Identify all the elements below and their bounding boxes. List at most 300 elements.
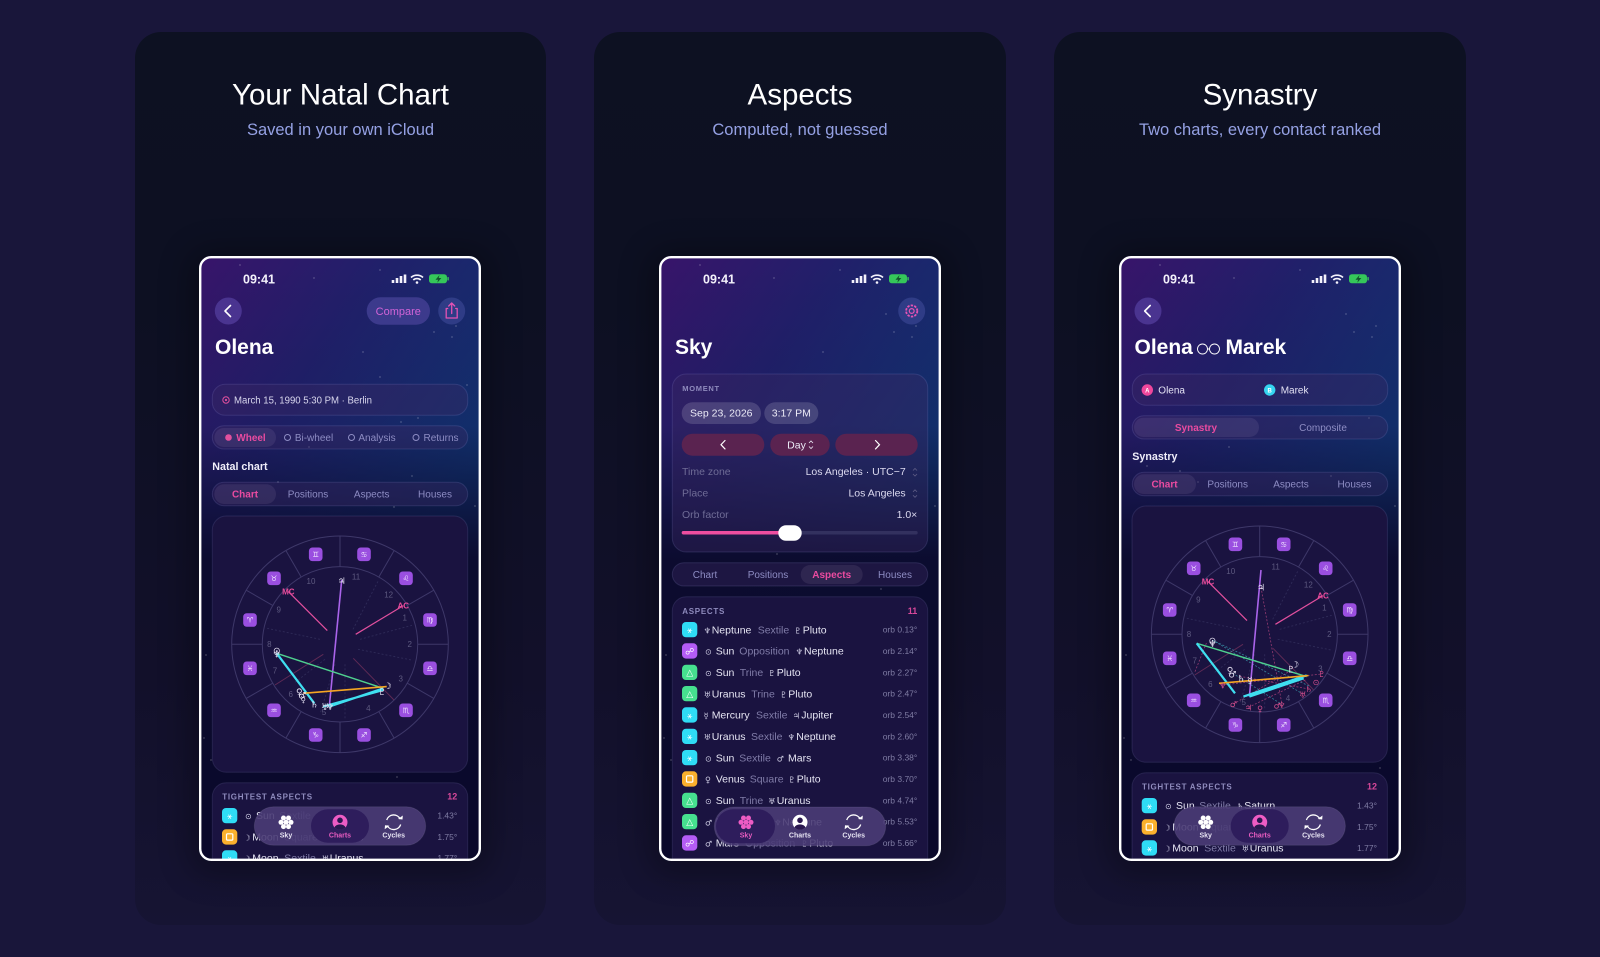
mode tabs	[212, 426, 468, 449]
heading: synastry: Synastry	[1203, 78, 1318, 112]
icon: charts	[1252, 815, 1267, 830]
aspect row: ☍	[685, 839, 694, 849]
compare button	[367, 297, 430, 325]
chart: synastry wheel: ♃	[1257, 584, 1265, 594]
chart: synastry wheel	[1151, 526, 1368, 743]
chart: natal wheel: ☿	[301, 695, 306, 705]
chart: synastry wheel: 10	[1226, 567, 1236, 576]
aspect row	[682, 793, 917, 808]
chart: natal wheel: 10	[307, 577, 316, 586]
subtitle: contacts: Two charts, every contact ranked	[1139, 121, 1381, 139]
aspect row: ♅	[1242, 844, 1249, 854]
subtitle: computed: Computed, not guessed	[712, 121, 888, 139]
chart tabs: Chart	[232, 490, 259, 501]
chart: synastry wheel: ♎	[1346, 654, 1353, 663]
aspect row: Saturn	[324, 810, 355, 822]
chart: natal wheel: ♏	[403, 706, 410, 715]
chart: synastry wheel: 4	[1286, 694, 1291, 703]
aspect row: Square	[1204, 822, 1238, 834]
panel: tightest aspects	[212, 782, 468, 859]
aspect row: orb 2.54°	[883, 710, 917, 720]
chart: natal wheel: 9	[276, 605, 281, 614]
aspect row: orb 2.60°	[883, 731, 917, 741]
aspect row: Moon	[1172, 822, 1199, 834]
settings rows: Place	[682, 487, 708, 499]
chart: natal wheel	[232, 536, 448, 753]
aspect row	[682, 665, 917, 680]
aspect row: ♂	[705, 818, 712, 827]
aspect row	[682, 835, 917, 851]
chart: natal wheel: ♅	[321, 703, 329, 713]
person card: Olena	[1158, 385, 1185, 396]
chart: natal wheel: 12	[384, 590, 394, 599]
aspect row: orb 2.47°	[883, 689, 917, 699]
chart: synastry wheel: ♂	[1230, 700, 1237, 709]
chart: natal wheel: ♂	[298, 691, 306, 701]
phone: sky screen	[659, 256, 941, 887]
aspect row: ♄	[1237, 802, 1244, 811]
aspect row: ⊙	[705, 797, 712, 806]
chart: synastry wheel: ♀	[1257, 704, 1263, 713]
panel: moment: MOMENT	[682, 384, 720, 393]
chart: synastry wheel: ♌	[1322, 564, 1329, 573]
phone: natal chart screen	[199, 256, 481, 883]
aspect row: ⚹	[227, 854, 233, 864]
icon: sky	[738, 816, 754, 829]
mode tabs: Synastry	[1175, 423, 1218, 434]
panel: aspects list: 11	[908, 606, 917, 616]
title: Olena	[215, 336, 274, 359]
chart: synastry wheel: ♐	[1280, 721, 1287, 730]
chart: natal wheel: 11	[352, 572, 361, 581]
bottom navigation: Cycles	[842, 833, 865, 840]
chart: synastry wheel: ♑	[1232, 721, 1239, 730]
panel: tightest aspects: 12	[1367, 782, 1377, 792]
panel: aspects list	[672, 597, 928, 887]
aspect row: Sun	[716, 752, 735, 764]
chart: synastry wheel: ☿	[1247, 676, 1253, 686]
aspect row: orb 3.38°	[883, 753, 917, 763]
chart: natal wheel: ♑	[312, 731, 319, 740]
aspect row: Sun	[256, 810, 275, 822]
aspect row: 1.77°	[1357, 843, 1377, 853]
aspect row: 1.77°	[437, 853, 457, 863]
chart: natal wheel: ♒	[271, 706, 278, 715]
chart: synastry wheel: 12	[1304, 580, 1313, 589]
chart: synastry wheel: ♋	[1280, 540, 1287, 549]
panel: natal wheel	[212, 516, 468, 772]
settings rows	[682, 466, 917, 521]
aspect row: ⚹	[1147, 802, 1153, 812]
stepper	[682, 434, 918, 456]
chart: natal wheel: 1	[402, 613, 407, 622]
aspect row	[682, 707, 917, 723]
settings rows: Los Angeles	[848, 487, 906, 499]
chart: synastry wheel: ⊙	[1313, 678, 1319, 687]
panel: tightest aspects	[1132, 773, 1387, 883]
chart: natal wheel: ♎	[427, 664, 434, 673]
mode tabs: Returns	[423, 433, 459, 444]
icon: charts	[792, 815, 808, 830]
aspect row: Mars	[716, 838, 739, 850]
mode tabs: Analysis	[358, 433, 396, 444]
aspect row: ⊙	[705, 669, 712, 678]
panel: tightest aspects: TIGHTEST ASPECTS	[222, 793, 313, 802]
aspect row: Uranus	[1250, 822, 1284, 834]
bottom navigation: Charts	[789, 833, 811, 840]
view tabs: Aspects	[812, 570, 852, 581]
compare button: Compare	[376, 306, 421, 318]
chart: synastry wheel: 7	[1192, 656, 1197, 665]
title	[1134, 336, 1287, 359]
chart: natal wheel: ♆	[326, 703, 334, 713]
aspect row	[1142, 798, 1377, 813]
chart: natal wheel: ♋	[361, 550, 367, 559]
aspect row: ⊙	[705, 754, 712, 763]
chart: synastry wheel: AC	[1317, 591, 1329, 600]
icon: cycles	[1304, 815, 1322, 830]
aspect row: ♅	[1242, 824, 1249, 832]
aspect row: △	[686, 669, 693, 679]
chart tabs: Aspects	[1273, 480, 1309, 491]
settings rows: Orb factor	[682, 509, 729, 521]
aspect row: ♇	[794, 626, 801, 635]
aspect row	[682, 729, 917, 744]
aspect row: Saturn	[1244, 800, 1275, 812]
aspect row: ♅	[322, 854, 329, 864]
title: Olena	[1134, 336, 1193, 359]
aspect row: ☽	[244, 854, 251, 864]
chart: synastry wheel: ♇	[1287, 665, 1295, 675]
aspect row: ♇	[780, 690, 787, 699]
aspect row: orb 2.27°	[883, 667, 917, 677]
aspect row: ⚹	[687, 733, 693, 743]
aspect row	[682, 771, 917, 787]
chart: natal wheel: ♉	[271, 574, 278, 583]
aspect row: ♂	[705, 840, 712, 849]
aspect row: Uranus	[330, 832, 364, 844]
person card: A	[1145, 388, 1150, 394]
aspect row: ⚹	[227, 812, 233, 822]
chart: synastry wheel: 9	[1196, 595, 1201, 604]
chart: synastry wheel: 8	[1187, 630, 1192, 639]
aspect row: orb 3.70°	[883, 774, 917, 784]
chart: natal wheel: ♐	[361, 731, 367, 740]
aspect row: ♇	[801, 840, 808, 849]
chart: natal wheel: ♊	[312, 550, 319, 559]
aspect row: Uranus	[712, 688, 746, 700]
aspect row: ♇	[788, 776, 795, 785]
chart: natal wheel: ♆	[273, 650, 281, 660]
chart: synastry wheel: ♆	[1219, 681, 1226, 690]
aspect row: 1.75°	[437, 832, 457, 842]
heading: your natal chart: Your Natal Chart	[232, 78, 449, 112]
date pill	[682, 402, 761, 424]
chart: natal wheel: 6	[288, 690, 293, 699]
back button	[1134, 298, 1162, 324]
chart: synastry wheel: 5	[1241, 698, 1246, 707]
aspect row: Trine	[741, 816, 765, 828]
mode tabs: Composite	[1299, 423, 1347, 434]
chart tabs	[212, 482, 468, 506]
aspect row	[222, 850, 457, 859]
aspect row: Opposition	[745, 838, 795, 850]
chart: synastry wheel: 1	[1322, 603, 1327, 612]
bottom navigation: Charts	[1249, 833, 1271, 840]
bottom navigation: Sky	[740, 833, 752, 840]
aspect row: ♆	[788, 733, 795, 742]
section heading: Synastry	[1132, 451, 1178, 463]
icon: cycles	[385, 815, 403, 830]
view tabs	[672, 563, 928, 586]
aspect row: Trine	[740, 667, 763, 679]
chart: synastry wheel: ⊙	[1209, 636, 1216, 646]
chart: synastry wheel: ♏	[1322, 696, 1329, 705]
chart: synastry wheel: ♉	[1190, 564, 1197, 573]
chart: synastry wheel: 3	[1318, 665, 1323, 674]
aspect row: Opposition	[739, 646, 790, 658]
panel: tightest aspects: TIGHTEST ASPECTS	[1142, 783, 1232, 792]
aspect row: ⊙	[705, 648, 712, 657]
panel: synastry wheel	[1132, 506, 1387, 762]
aspect row	[682, 686, 917, 701]
aspect row: Moon	[252, 832, 279, 844]
aspect row: ♅	[704, 690, 711, 699]
aspect row: ♅	[704, 733, 711, 742]
aspect row: 1.75°	[1357, 822, 1377, 832]
chart: synastry wheel: ♄	[1237, 675, 1245, 685]
aspect row: ♆	[774, 818, 781, 827]
status bar: 09:41	[243, 272, 275, 286]
aspect row: Pluto	[777, 667, 801, 679]
chart: synastry wheel: 11	[1272, 562, 1280, 571]
aspect row: ☿	[704, 712, 709, 721]
aspect row: △	[686, 797, 693, 807]
icon: sky	[278, 816, 294, 829]
aspect row: Moon	[1172, 842, 1199, 854]
chart: natal wheel: 4	[366, 704, 371, 713]
back button	[215, 298, 242, 324]
aspect row	[222, 829, 457, 845]
time pill	[764, 402, 818, 424]
chart: natal wheel: ♌	[403, 574, 409, 583]
panel: your natal chart	[135, 32, 546, 925]
aspect row: △	[686, 690, 693, 700]
status bar	[244, 274, 449, 284]
chart: synastry wheel: ♅	[1299, 690, 1306, 699]
time pill: 3:17 PM	[772, 408, 811, 420]
aspect row: ⚹	[687, 754, 693, 764]
chart tabs: Houses	[418, 490, 452, 501]
aspect row: Uranus	[777, 795, 811, 807]
subtitle: saved in icloud: Saved in your own iCloud	[247, 121, 434, 139]
chart tabs	[1132, 472, 1388, 496]
aspect row	[222, 808, 457, 823]
bottom navigation	[1174, 807, 1345, 845]
bottom navigation	[714, 807, 886, 846]
birth details card: March 15, 1990 5:30 PM · Berlin	[234, 396, 372, 406]
aspect row: Neptune	[796, 731, 836, 743]
heading: aspects: Aspects	[748, 78, 852, 112]
settings rows: Time zone	[682, 466, 731, 478]
chart: natal wheel: ☽	[384, 682, 392, 692]
icon: charts	[332, 815, 348, 830]
chart: synastry wheel: ☽	[1291, 660, 1299, 670]
chart: natal wheel: AC	[398, 601, 409, 610]
aspect row: orb 0.13°	[883, 625, 917, 635]
panel: tightest aspects: 12	[447, 792, 457, 802]
aspect row: Sextile	[1199, 800, 1231, 812]
person card	[1132, 374, 1388, 405]
aspect row: ♅	[768, 797, 775, 806]
chart tabs: Positions	[1207, 480, 1248, 491]
aspect row: Neptune	[782, 816, 822, 828]
orb slider	[682, 525, 918, 541]
chart tabs: Aspects	[354, 490, 389, 501]
chart: natal wheel: 7	[273, 666, 278, 675]
share button	[438, 298, 465, 324]
aspect row: △	[686, 818, 693, 828]
aspect row: Pluto	[803, 624, 827, 636]
aspect row	[682, 750, 917, 765]
aspect row: orb 5.53°	[883, 817, 917, 827]
bottom navigation: Sky	[1199, 833, 1212, 840]
settings rows: 1.0×	[897, 509, 917, 521]
person card: B	[1268, 388, 1273, 394]
aspect row: ♄	[317, 812, 324, 821]
aspect row: ♀	[705, 776, 711, 785]
aspect row: Sun	[716, 646, 735, 658]
icon: cycles	[845, 815, 863, 830]
aspect row: ⚹	[687, 626, 693, 636]
chart: natal wheel: ⊙	[273, 646, 280, 656]
aspect row: ☽	[1164, 824, 1171, 832]
aspect row: Uranus	[330, 852, 364, 864]
settings button	[898, 298, 925, 324]
chart: synastry wheel: 6	[1208, 680, 1213, 689]
date pill: Sep 23, 2026	[690, 408, 753, 420]
aspect row: Trine	[740, 795, 763, 807]
chart: synastry wheel: ♍	[1346, 606, 1353, 615]
section heading: Natal chart	[212, 461, 268, 473]
chart tabs: Positions	[288, 490, 328, 501]
title: Sky	[675, 336, 713, 359]
chart: natal wheel: ♓	[247, 664, 253, 673]
chart: synastry wheel: ♃	[1245, 703, 1252, 712]
aspect row: ♅	[322, 834, 329, 842]
chart: synastry wheel: ♀	[1227, 666, 1233, 676]
aspect row: Jupiter	[801, 710, 833, 722]
aspect row: Square	[284, 832, 318, 844]
person card: Marek	[1281, 385, 1309, 396]
settings rows: Los Angeles · UTC−7	[806, 466, 906, 478]
aspect row: Mercury	[712, 710, 750, 722]
chart: natal wheel: 5	[322, 708, 327, 717]
chart: natal wheel: ♇	[378, 688, 386, 698]
aspect row: orb 5.66°	[883, 838, 917, 848]
chart: natal wheel: MC	[282, 587, 295, 596]
chart: natal wheel: 3	[398, 675, 403, 684]
chart: natal wheel: ♈	[247, 616, 254, 625]
chart: natal wheel: 8	[267, 640, 272, 649]
aspect row: Sun	[716, 667, 735, 679]
chart: synastry wheel: ♒	[1190, 696, 1197, 705]
aspect row: ♂	[777, 754, 784, 763]
bottom navigation: Charts	[329, 833, 351, 840]
status bar	[704, 274, 909, 284]
aspect row: Sun	[716, 795, 735, 807]
title: Marek	[1226, 336, 1287, 359]
mode tabs: Bi-wheel	[295, 433, 333, 444]
aspect row: Neptune	[712, 624, 752, 636]
aspect row: Neptune	[804, 646, 844, 658]
aspect row: Sextile	[284, 852, 316, 864]
aspect row: Pluto	[788, 688, 812, 700]
phone: synastry screen	[1119, 256, 1401, 883]
view tabs: Houses	[878, 570, 912, 581]
status bar: 09:41	[703, 272, 735, 286]
chart: synastry wheel: 2	[1327, 630, 1332, 639]
aspect row: Pluto	[797, 774, 821, 786]
chart: synastry wheel: ♂	[1228, 670, 1236, 680]
aspect row: orb 2.14°	[883, 646, 917, 656]
stepper: Day	[787, 439, 807, 451]
view tabs: Positions	[748, 570, 788, 581]
aspect row	[1142, 819, 1377, 835]
chart: synastry wheel: ♓	[1166, 654, 1173, 663]
aspect row: ♆	[704, 626, 711, 635]
aspect row: Sextile	[756, 710, 788, 722]
aspect row: 1.43°	[1357, 801, 1377, 811]
aspect row: ☍	[685, 647, 694, 657]
aspect row	[682, 622, 917, 637]
panel: aspects	[594, 32, 1006, 925]
aspect row: ⊙	[245, 812, 252, 821]
chart: synastry wheel: ♊	[1232, 540, 1239, 549]
aspect row: Sextile	[751, 731, 783, 743]
aspect row: Mars	[716, 816, 739, 828]
mode tabs: Wheel	[236, 433, 266, 444]
chart: natal wheel: ♀	[296, 688, 303, 698]
aspect row: Moon	[252, 852, 279, 864]
aspect row	[682, 814, 917, 829]
chart: natal wheel: ♍	[427, 616, 434, 625]
panel: moment	[672, 374, 928, 552]
chart: synastry wheel: ♈	[1166, 606, 1173, 615]
view tabs: Chart	[693, 570, 717, 581]
aspect row: Sextile	[279, 810, 311, 822]
chart: synastry wheel: ♆	[1208, 640, 1216, 650]
aspect row: Sextile	[739, 752, 771, 764]
aspect row: Sextile	[758, 624, 789, 636]
aspect row: ⚹	[1147, 844, 1153, 854]
status bar: 09:41	[1163, 272, 1195, 286]
status bar	[1163, 272, 1369, 286]
aspect row: ⚹	[687, 711, 693, 721]
panel: synastry	[1054, 32, 1466, 925]
aspect row: ⊙	[1165, 802, 1172, 811]
bottom navigation: Cycles	[1302, 833, 1325, 840]
chart tabs: Chart	[1151, 480, 1178, 491]
icon: sky	[1198, 816, 1213, 829]
aspect row	[682, 643, 917, 659]
birth details card	[212, 384, 468, 415]
aspect row: Uranus	[712, 731, 746, 743]
bottom navigation: Sky	[280, 833, 292, 840]
chart: synastry wheel: ♆	[1278, 701, 1285, 710]
chart: natal wheel: ♃	[338, 577, 346, 587]
chart: synastry wheel: ♇	[1318, 670, 1325, 679]
